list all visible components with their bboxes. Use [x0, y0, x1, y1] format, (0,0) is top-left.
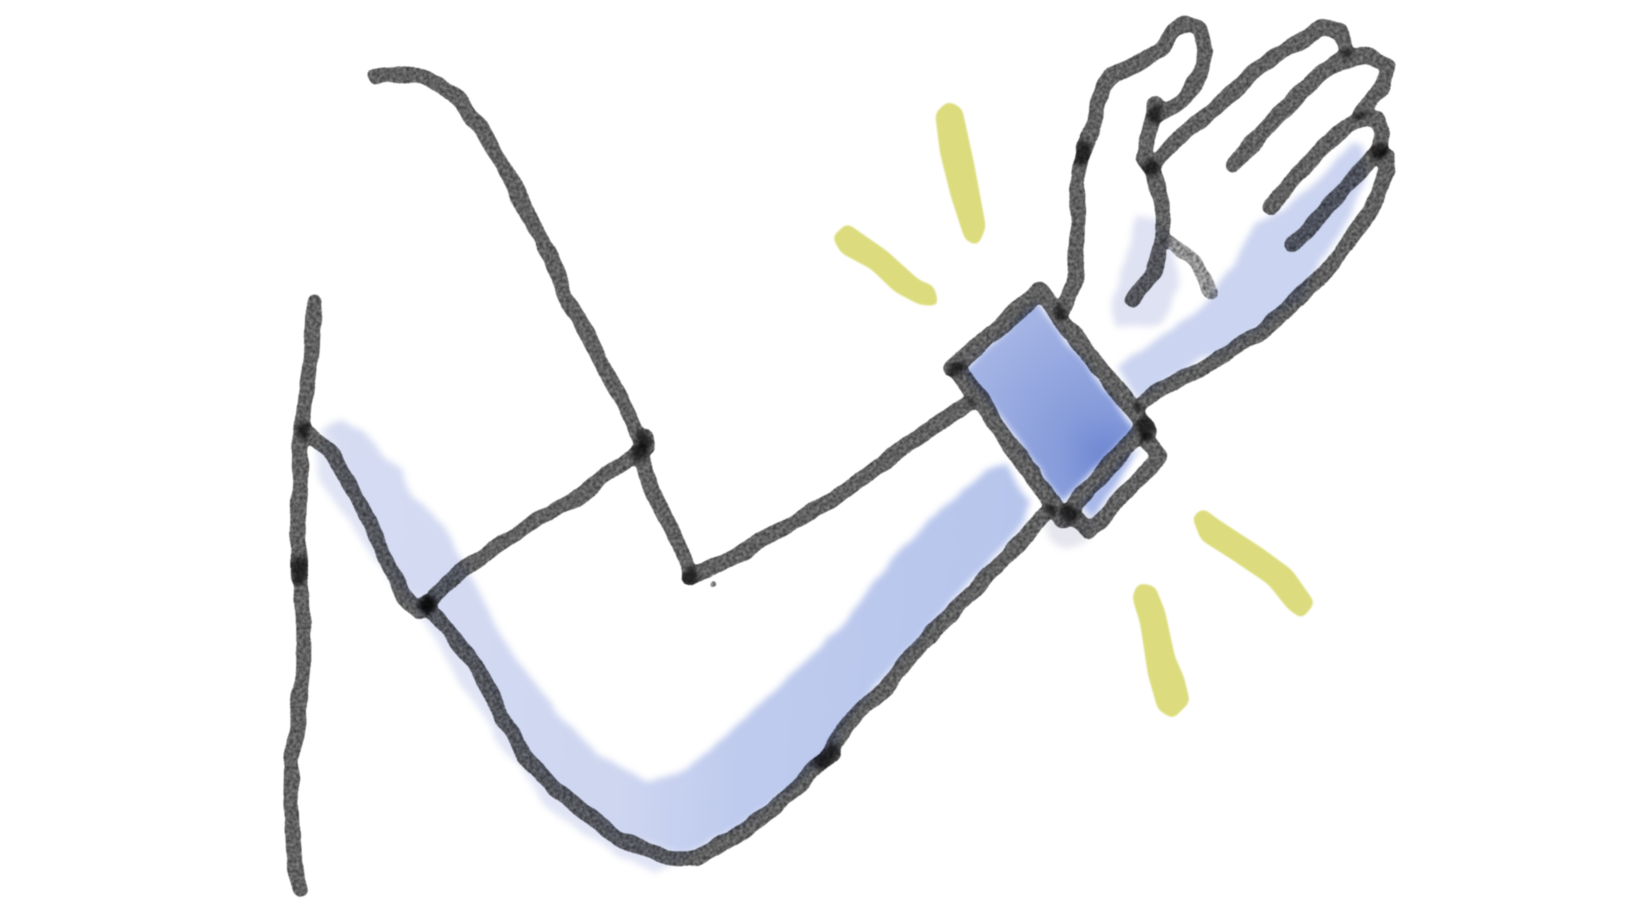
line: lower forearm to wrist	[822, 510, 1048, 762]
line: elbow and lower forearm	[425, 603, 832, 858]
line: outer wrist	[1140, 157, 1387, 405]
ink outline	[291, 24, 1387, 889]
accent marks: yellow motion strokes	[832, 101, 1315, 719]
watch: case lower edges	[958, 370, 1146, 520]
watch: strap	[1068, 440, 1160, 532]
line: torso lower	[291, 565, 303, 889]
watch face	[965, 301, 1140, 518]
line: middle finger	[1233, 55, 1387, 165]
line: thumb	[1080, 24, 1206, 158]
accent: left stroke	[832, 223, 939, 306]
line: inner elbow	[638, 450, 692, 577]
line: index finger	[1150, 27, 1347, 168]
line: ring finger	[1270, 118, 1383, 207]
line: upper arm underside	[304, 430, 430, 612]
watercolor wash: arm	[315, 420, 1092, 872]
accent: upper stroke	[935, 101, 986, 246]
watch: case top edges	[952, 292, 1148, 430]
line: upper forearm	[690, 405, 967, 577]
line: torso	[298, 303, 314, 578]
accent: right stroke	[1192, 508, 1315, 619]
ink speck	[708, 580, 716, 586]
line: sleeve hem	[427, 436, 646, 606]
line: palm crease	[1170, 242, 1210, 293]
line: thumb inner and palm	[1132, 103, 1162, 300]
line: shoulder to sleeve	[376, 74, 642, 442]
watercolor wash: palm and wrist	[1110, 143, 1367, 400]
accent: lower stroke	[1132, 583, 1190, 719]
line: little finger	[1293, 150, 1380, 245]
line: back of hand	[1062, 148, 1082, 312]
